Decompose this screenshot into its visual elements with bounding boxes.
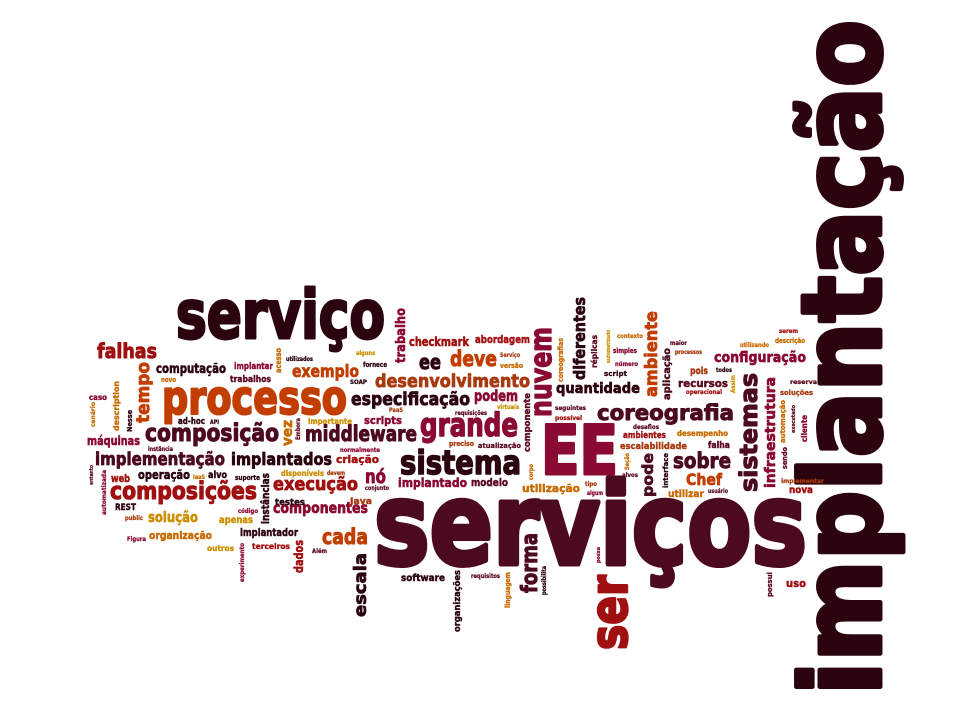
word: conjunto: conjunto: [365, 485, 389, 492]
word: sistema: sistema: [400, 443, 521, 482]
word: processos: processos: [675, 349, 702, 356]
word: código: código: [238, 508, 258, 515]
word: novo: novo: [161, 376, 176, 384]
word: réplicas: réplicas: [589, 335, 599, 368]
word: Figura: Figura: [127, 536, 146, 543]
word: grande: grande: [420, 406, 518, 444]
word: computação: computação: [156, 362, 226, 377]
word: infraestrutura: infraestrutura: [763, 377, 779, 488]
word: diferentes: diferentes: [570, 297, 589, 380]
word: número: número: [615, 361, 638, 368]
word: Além: Além: [312, 548, 327, 555]
word: uso: uso: [786, 577, 806, 590]
word: pois: pois: [690, 366, 708, 377]
word: alvo: alvo: [208, 470, 227, 481]
word: forma: forma: [518, 533, 543, 593]
word: possa: possa: [596, 547, 602, 563]
word: caso: caso: [89, 393, 107, 402]
word: operação: operação: [138, 468, 190, 482]
word: ser: ser: [580, 575, 640, 650]
word: solução: solução: [148, 510, 198, 526]
word: abordagem: abordagem: [475, 333, 530, 346]
word: Serviço: Serviço: [500, 352, 520, 359]
word: alvos: alvos: [622, 472, 638, 479]
word: organização: organização: [149, 529, 212, 542]
word: coreografia: coreografia: [597, 401, 734, 425]
word: podem: podem: [474, 387, 518, 405]
word: execução: execução: [273, 474, 358, 495]
word: versão: versão: [500, 362, 523, 370]
word: testes: testes: [275, 498, 305, 508]
word: sistemas: sistemas: [735, 373, 763, 492]
word: preciso: preciso: [449, 440, 474, 448]
word: script: script: [604, 370, 628, 378]
word: implementação: implementação: [95, 449, 225, 470]
word: EE: EE: [541, 412, 618, 491]
word: criação: criação: [336, 453, 379, 466]
word: componentes: componentes: [273, 499, 368, 517]
word: suporte: suporte: [235, 474, 260, 482]
word: especificação: especificação: [351, 389, 470, 410]
word: implantar: implantar: [234, 362, 273, 372]
word: algum: algum: [587, 490, 603, 497]
word: contexto: contexto: [617, 333, 643, 340]
word: IaaS: IaaS: [193, 474, 205, 481]
word: requisitos: requisitos: [471, 573, 500, 580]
word: outros: outros: [207, 544, 234, 553]
word: normalmente: normalmente: [340, 447, 380, 454]
word: escalabilidade: escalabilidade: [620, 442, 687, 452]
word: serem: serem: [779, 328, 798, 335]
word: REST: REST: [115, 503, 137, 513]
word: interface: interface: [662, 453, 670, 488]
word: cenário: cenário: [90, 402, 97, 427]
word: Seção: Seção: [624, 453, 631, 470]
word: reserva: reserva: [790, 379, 817, 386]
word: usuário: usuário: [708, 488, 728, 495]
word: nó: nó: [365, 466, 386, 488]
word: acesso: acesso: [274, 348, 283, 373]
word: automatizada: automatizada: [101, 470, 108, 515]
word: desenvolvimento: desenvolvimento: [375, 371, 530, 392]
word: sendo: sendo: [781, 447, 789, 469]
word: web: web: [111, 472, 130, 485]
word: checkmark: checkmark: [409, 335, 470, 349]
word: todos: todos: [716, 367, 732, 374]
word: SOAP: SOAP: [350, 379, 368, 386]
word: escala: escala: [351, 553, 371, 617]
word: devem: devem: [327, 470, 345, 477]
word: atualização: atualização: [478, 442, 521, 450]
word: instâncias: instâncias: [259, 473, 272, 524]
word: software: software: [401, 573, 445, 584]
word: description: description: [112, 381, 121, 431]
word: operacional: operacional: [686, 389, 722, 396]
word: tipo: tipo: [585, 481, 597, 488]
word: seguintes: seguintes: [555, 405, 586, 412]
word: middleware: middleware: [305, 422, 417, 446]
word: falhas: falhas: [97, 339, 157, 363]
word: executado: executado: [791, 404, 797, 433]
word: apenas: apenas: [219, 515, 253, 526]
word: entanto: entanto: [89, 464, 95, 485]
word: linguagem: linguagem: [504, 572, 512, 608]
word: deve: deve: [450, 347, 497, 371]
word: falha: falha: [708, 441, 730, 451]
word: trabalhos: trabalhos: [230, 375, 271, 385]
word: maior: maior: [670, 340, 687, 347]
word: ambiente: ambiente: [642, 311, 662, 397]
word: cliente: cliente: [800, 415, 809, 442]
word: implantados: implantados: [231, 450, 332, 470]
word: implantado: implantado: [398, 476, 467, 490]
word: automatizado: automatizado: [606, 330, 612, 363]
word: nuvem: nuvem: [524, 327, 558, 417]
word: utilizando: utilizando: [740, 342, 769, 349]
word: recursos: recursos: [678, 377, 728, 390]
word: ee: ee: [419, 350, 441, 374]
word: Nesse: Nesse: [126, 410, 134, 432]
word: automação: automação: [779, 400, 787, 443]
word: virtuais: virtuais: [497, 404, 519, 411]
word: composições: composições: [110, 477, 257, 505]
word: vez: vez: [280, 420, 296, 446]
word: organizações: organizações: [453, 570, 463, 632]
word: sobre: sobre: [673, 449, 731, 473]
word: scripts: scripts: [364, 414, 402, 427]
word: corpo: corpo: [528, 464, 535, 480]
word: tempo: tempo: [133, 362, 154, 423]
word: composição: composição: [145, 419, 279, 447]
word: requisições: requisições: [455, 410, 487, 417]
word: importante: importante: [308, 417, 352, 426]
word: exemplo: exemplo: [292, 362, 359, 382]
word: possibilita: possibilita: [541, 566, 548, 595]
word: componente: componente: [523, 393, 533, 452]
word: serviços: serviços: [374, 459, 807, 591]
word: instância: instância: [148, 446, 173, 453]
word: soluções: soluções: [780, 389, 813, 397]
word: descrição: descrição: [775, 337, 805, 345]
word: disponíveis: disponíveis: [281, 469, 324, 478]
word: configuração: configuração: [714, 350, 806, 366]
word: ambientes: ambientes: [623, 431, 666, 441]
word: Chef: Chef: [686, 470, 723, 489]
word: nova: nova: [789, 485, 813, 496]
word: possui: possui: [766, 572, 774, 597]
word: ad-hoc: ad-hoc: [178, 417, 205, 427]
word: serviço: serviço: [176, 276, 385, 354]
word: máquinas: máquinas: [87, 434, 140, 448]
word: utilizar: utilizar: [668, 489, 704, 500]
word: quantidade: quantidade: [556, 381, 640, 397]
word: possível: possível: [555, 415, 582, 422]
word: alguns: alguns: [356, 350, 375, 357]
word: utilizados: utilizados: [286, 356, 313, 363]
word: Assim: Assim: [730, 375, 737, 393]
word: processo: processo: [162, 371, 347, 425]
word: trabalho: trabalho: [394, 308, 409, 363]
word: PaaS: PaaS: [389, 407, 403, 414]
word: simples: simples: [613, 347, 637, 355]
word: coreografias: coreografias: [557, 338, 565, 382]
word: implementar: implementar: [781, 478, 824, 485]
word: utilização: utilização: [522, 482, 580, 495]
word: experimento: experimento: [239, 543, 246, 582]
word: fornece: fornece: [363, 361, 387, 369]
word: implantador: implantador: [240, 526, 298, 539]
word: desafios: desafios: [633, 424, 659, 431]
word: terceiros: terceiros: [252, 542, 290, 551]
word: aplicação: aplicação: [662, 348, 673, 400]
word: dados: dados: [292, 540, 306, 573]
word: cada: cada: [322, 525, 368, 549]
word: public: public: [125, 515, 143, 522]
word: Java: Java: [349, 497, 372, 507]
word: desempenho: desempenho: [677, 429, 728, 438]
word: API: API: [210, 419, 219, 426]
word: Embora: Embora: [295, 418, 302, 440]
word: modelo: modelo: [471, 476, 508, 489]
word: pode: pode: [639, 453, 657, 497]
